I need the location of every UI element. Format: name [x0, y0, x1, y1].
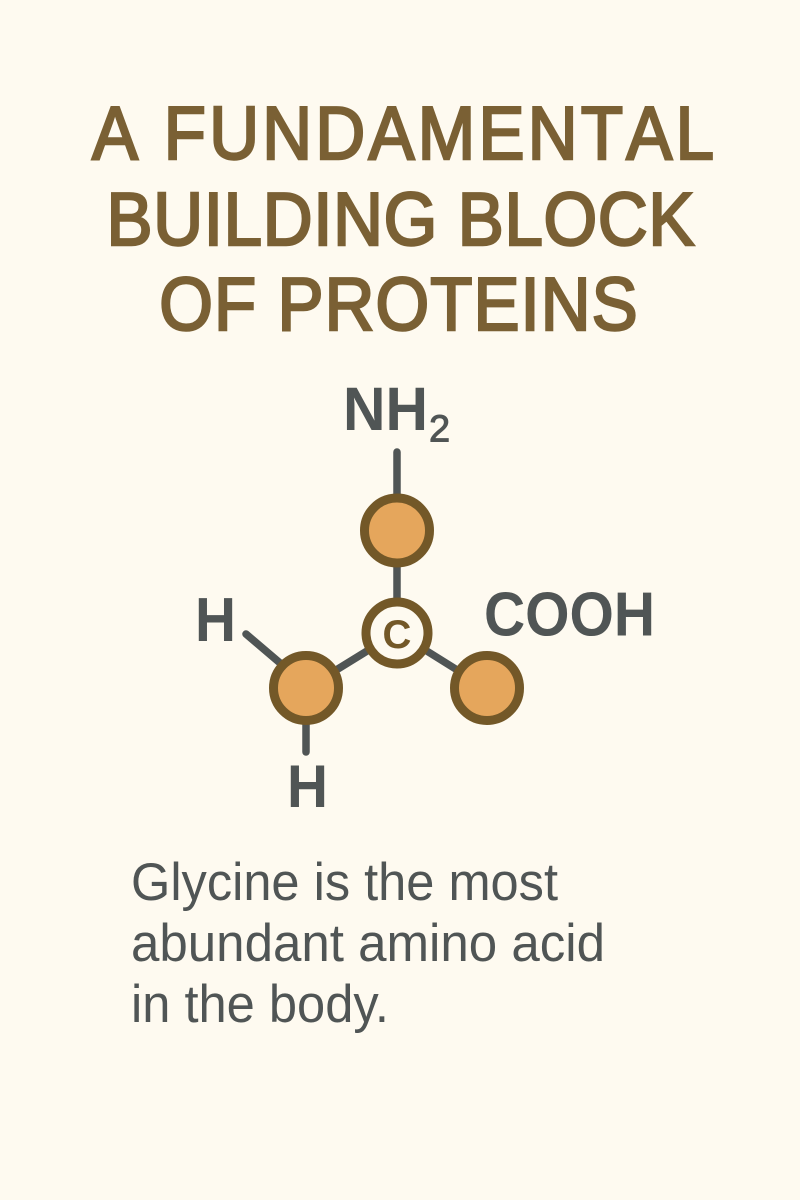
label: H left: H — [195, 586, 236, 655]
molecule diagram — [195, 375, 655, 820]
caption text: abundant amino acid — [131, 914, 605, 973]
atom: top — [364, 498, 430, 563]
atom: central carbon: C — [383, 613, 411, 657]
caption text: Glycine is the most — [131, 853, 558, 912]
caption text — [131, 853, 605, 1034]
atom: central carbon — [366, 602, 428, 664]
label: H bottom: H — [287, 753, 328, 820]
title — [92, 92, 714, 347]
title: BUILDING BLOCK — [107, 178, 694, 262]
label: NH2: NH — [343, 375, 428, 443]
bonds — [246, 452, 470, 752]
caption text: in the body. — [131, 975, 389, 1034]
atom: right — [454, 656, 520, 720]
title: OF PROTEINS — [159, 263, 638, 347]
title: A FUNDAMENTAL — [92, 92, 714, 176]
atom: left — [274, 656, 338, 720]
label: NH2: 2 — [429, 408, 450, 450]
label: COOH: COOH — [484, 580, 655, 650]
